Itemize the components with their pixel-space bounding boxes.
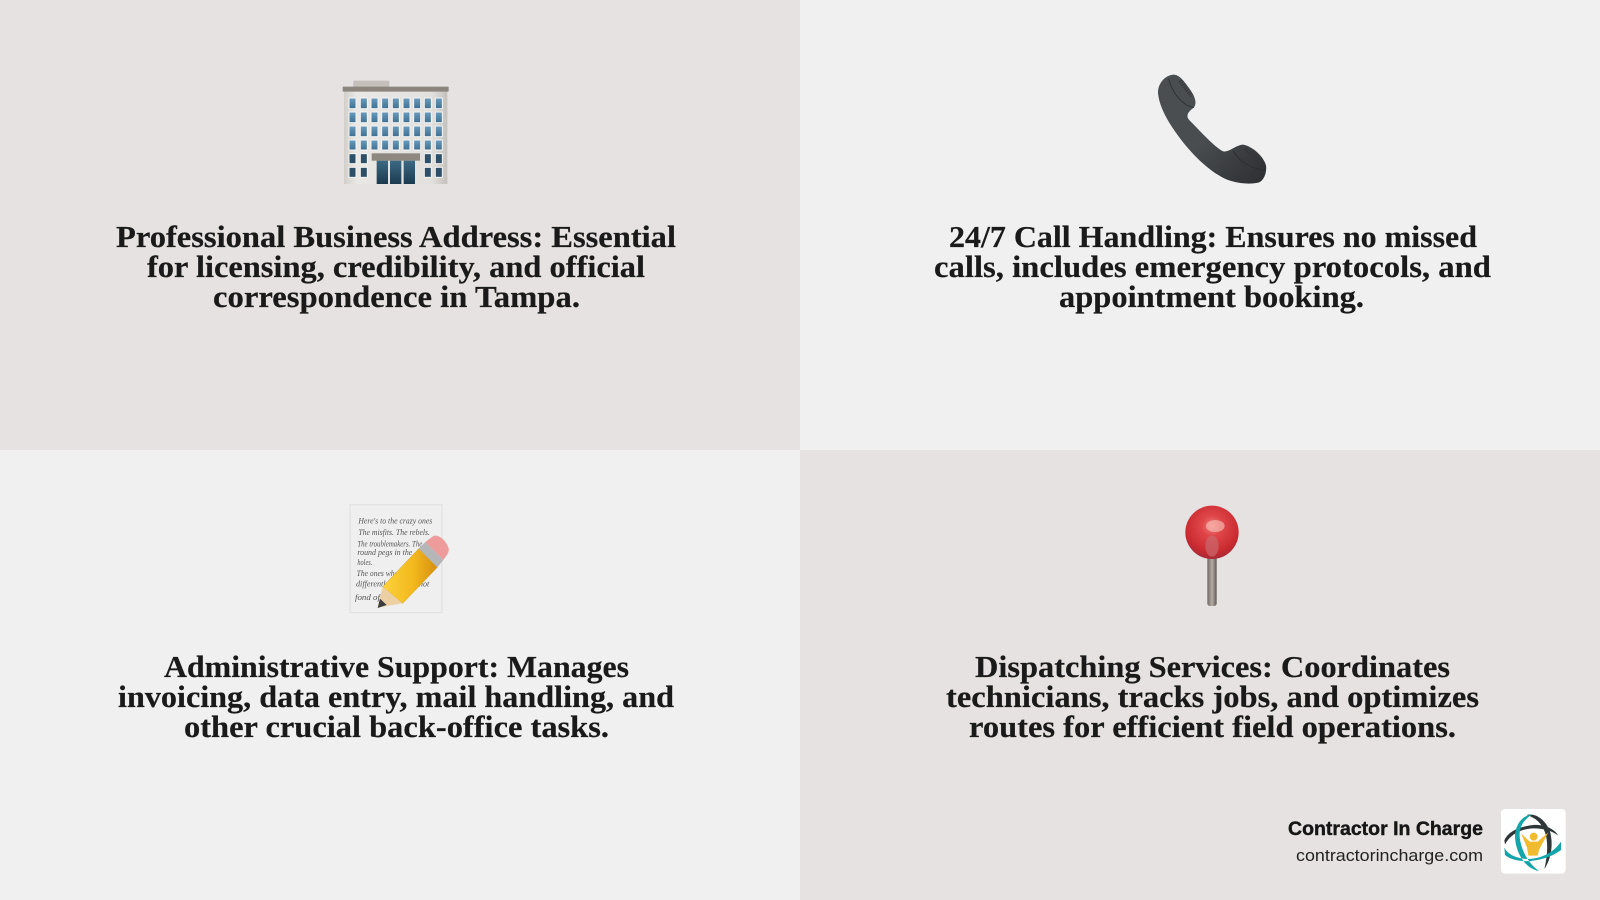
heading: 24/7 call handling: calls, includes emergency protocols, and <box>934 249 1491 284</box>
logo teal orbit <box>1504 814 1561 871</box>
heading: dispatching services: technicians, tracks jobs, and optimizes <box>946 679 1479 714</box>
icon: office building <box>343 81 449 184</box>
panel: administrative support <box>0 450 800 900</box>
logo <box>1501 809 1566 874</box>
heading: professional business address: correspondence in Tampa. <box>213 279 580 314</box>
panel: dispatching services <box>800 450 1600 900</box>
icon: round pushpin <box>1185 506 1239 606</box>
icon: memo with pencil: fond of <box>355 593 382 602</box>
logo dark orbit <box>1504 815 1558 869</box>
icon: memo with pencil: differently. They're not <box>356 580 430 589</box>
brand name: Contractor In Charge <box>1288 819 1483 840</box>
icon: memo with pencil: The ones who <box>357 569 398 578</box>
panel: professional business address <box>0 0 800 450</box>
logo person <box>1521 832 1548 856</box>
icon: memo with pencil: The troublemakers. The <box>357 540 423 549</box>
heading: dispatching services: Dispatching Services: Coordinates <box>975 649 1450 684</box>
heading: administrative support: invoicing, data entry, mail handling, and <box>118 679 674 714</box>
icon: telephone receiver <box>1158 75 1266 184</box>
heading: 24/7 call handling: 24/7 Call Handling: Ensures no missed <box>949 219 1477 254</box>
icon: memo with pencil: holes. <box>357 558 372 567</box>
icon: memo with pencil: The misfits. The rebels. <box>358 528 430 537</box>
icon: memo with pencil <box>349 504 449 613</box>
icon: memo with pencil: Here's to the crazy ones <box>357 516 432 525</box>
heading: professional business address: for licensing, credibility, and official <box>147 249 645 284</box>
heading: dispatching services: routes for efficient field operations. <box>969 709 1456 744</box>
brand website: contractorincharge.com <box>1296 846 1483 865</box>
panel: 24/7 call handling <box>800 0 1600 450</box>
heading: professional business address: Professional Business Address: Essential <box>116 219 676 254</box>
heading: administrative support: Administrative Support: Manages <box>164 649 629 684</box>
heading: administrative support: other crucial back-office tasks. <box>184 709 609 744</box>
heading: 24/7 call handling: appointment booking. <box>1059 279 1364 314</box>
icon: memo with pencil: round pegs in the <box>357 548 413 557</box>
